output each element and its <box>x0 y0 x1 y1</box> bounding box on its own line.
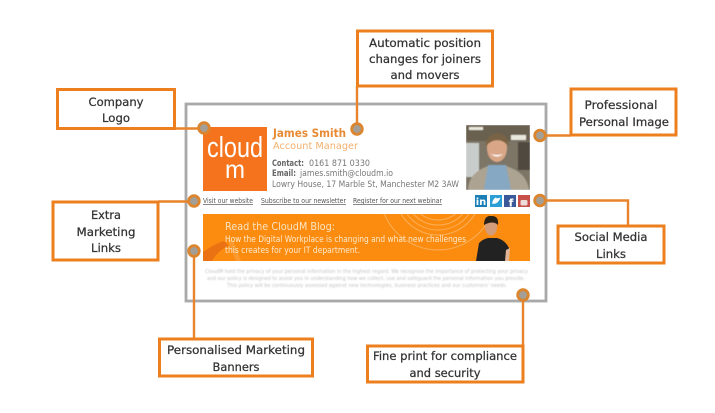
marker dots <box>189 123 545 300</box>
callout: social media links: Links <box>596 247 626 261</box>
marketing banner <box>203 214 530 261</box>
callout: personalised marketing banners: Personalised Marketing <box>167 343 305 357</box>
contact details: Lowry House, 17 Marble St, Manchester M2 3AW <box>272 180 460 190</box>
banner text: How the Digital Workplace is changing and what new challenges <box>225 235 466 245</box>
callout: extra marketing links: Extra <box>91 208 121 222</box>
marketing links: Register for our next webinar <box>353 197 442 205</box>
signature frame <box>186 104 546 301</box>
banner presenter <box>476 216 510 261</box>
callout: personalised marketing banners: Banners <box>212 360 260 374</box>
callout: professional personal image: Professional <box>584 98 658 112</box>
fine print: CloudM hold the privacy of your personal information in the highest regard. We recognise the importance of protecting your privacy <box>205 269 529 275</box>
personal photo <box>466 125 530 190</box>
callout: company logo <box>58 90 174 128</box>
fine print: This policy will be continuously assessed against new technologies, business practices and our customers' needs. <box>226 283 507 289</box>
callout: professional personal image <box>571 89 676 135</box>
company logo: cloud <box>207 132 263 164</box>
contact details <box>272 126 460 190</box>
callout: social media links <box>558 226 664 263</box>
fine print <box>205 269 529 289</box>
callout: professional personal image: Personal Image <box>579 115 669 129</box>
contact details: Account Manager <box>273 141 359 152</box>
banner text: Read the CloudM Blog: <box>225 221 335 233</box>
callout: fine print <box>368 346 523 382</box>
callout: fine print: and security <box>410 366 481 380</box>
callout: extra marketing links: Marketing <box>76 225 136 239</box>
contact details: 0161 871 0330 <box>309 159 370 169</box>
banner text <box>225 221 466 256</box>
contact details: Contact: <box>272 159 304 169</box>
connectors <box>158 86 628 346</box>
marketing links <box>203 197 442 205</box>
contact details: James Smith <box>272 126 346 140</box>
company logo: m <box>225 156 245 184</box>
callout: automatic position changes: Automatic position <box>369 36 481 50</box>
social media icons: in <box>476 197 486 208</box>
marketing links: Subscribe to our newsletter <box>261 197 346 205</box>
callout: automatic position changes <box>358 31 492 86</box>
callout: automatic position changes: and movers <box>390 68 460 82</box>
social media icons: f <box>509 196 514 210</box>
contact details: Email: <box>272 169 296 179</box>
callout: fine print: Fine print for compliance <box>373 349 517 363</box>
callout: extra marketing links <box>53 202 158 260</box>
callout: social media links: Social Media <box>574 230 648 244</box>
callout: automatic position changes: changes for joiners <box>369 52 481 66</box>
callout: personalised marketing banners <box>160 339 312 376</box>
fine print: and our policy is designed to assist you in understanding how we collect, use and safeguard the personal information you provide. <box>207 276 525 282</box>
callout: extra marketing links: Links <box>91 241 121 255</box>
company logo <box>203 127 267 191</box>
contact details: james.smith@cloudm.io <box>299 169 393 179</box>
social media icons <box>475 195 530 210</box>
marketing links: Visit our website <box>203 197 253 205</box>
callout: company logo: Company <box>88 95 144 109</box>
callout: company logo: Logo <box>102 111 130 125</box>
banner text: this creates for your IT department. <box>225 246 360 256</box>
